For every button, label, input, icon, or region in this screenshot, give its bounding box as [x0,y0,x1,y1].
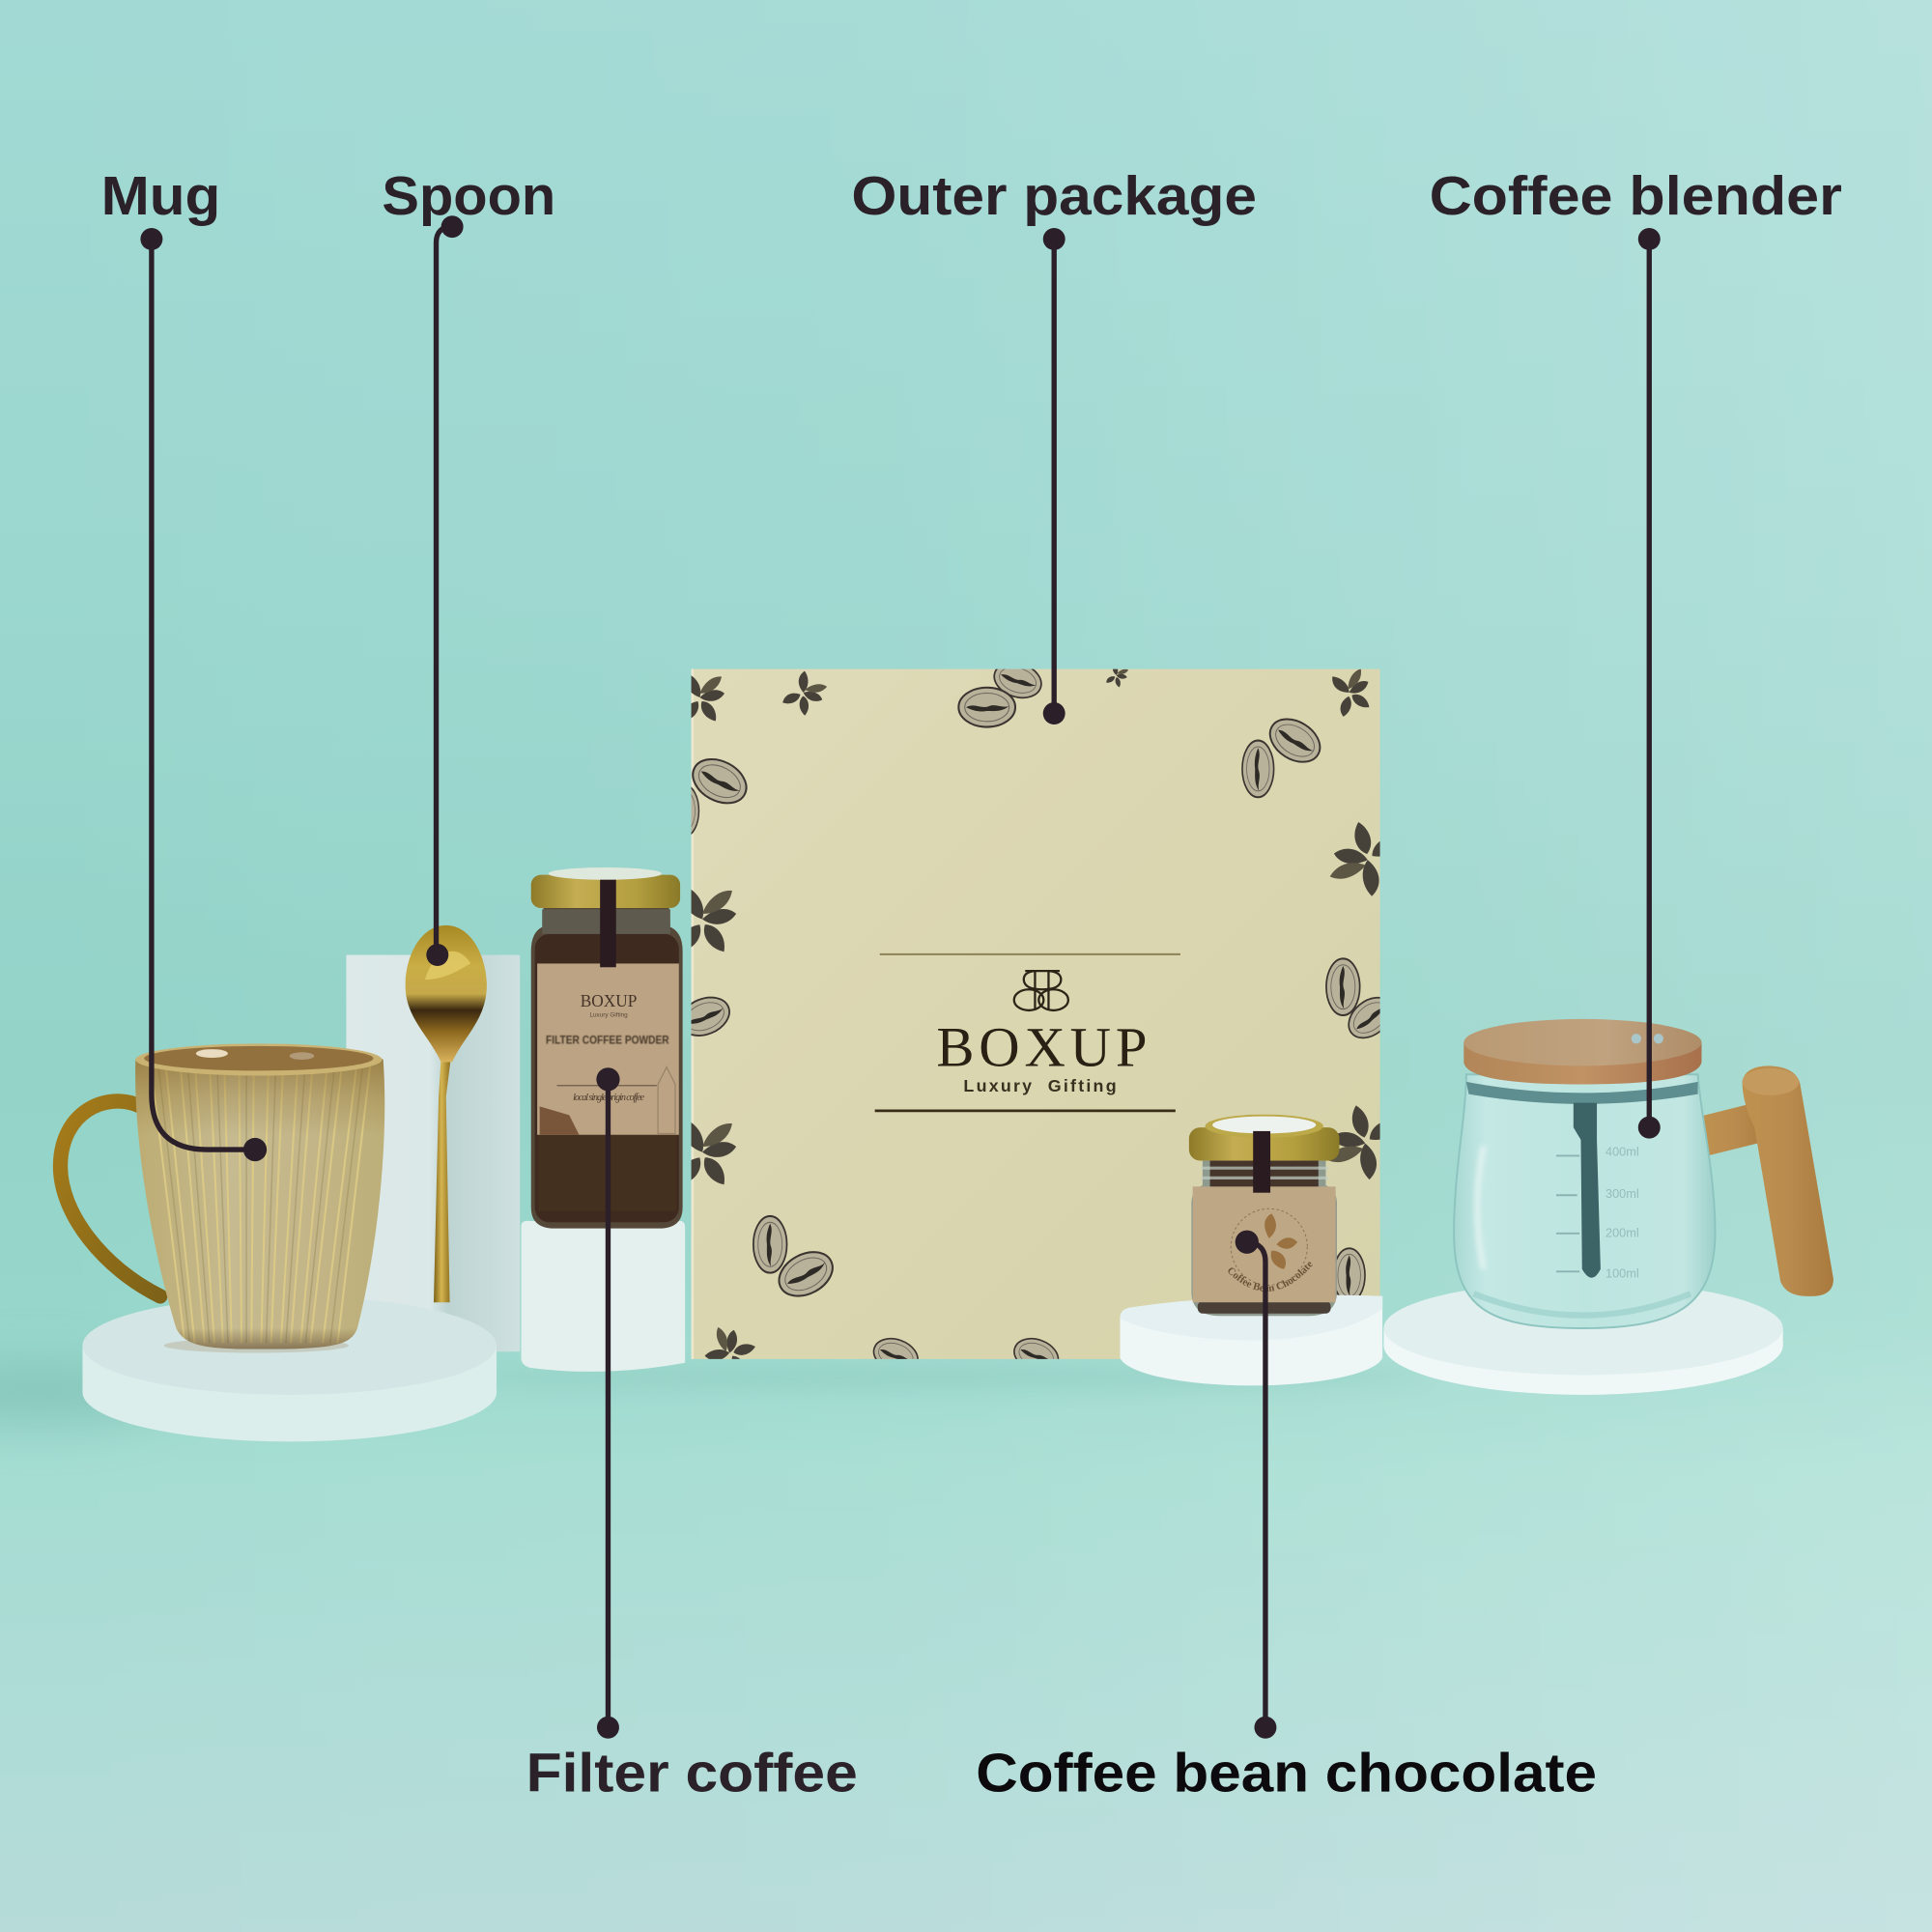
blender measuring scale: 200ml [1605,1226,1639,1240]
callout: Coffee bean chocolate: Coffee bean chocolate [976,1743,1597,1804]
item: filter coffee jar [531,867,683,1229]
callout: Mug: Mug [101,165,220,226]
blender wooden lid [1463,1019,1701,1084]
callout: Filter coffee: Filter coffee [526,1743,858,1804]
prop: right white disc [1383,1282,1783,1395]
panel: outer package box [671,657,1401,1378]
box logo: BOXUP Luxury Gifting [875,954,1180,1111]
callout: Outer package [851,165,1257,724]
mug body with ribs [135,1059,384,1349]
jar lid [531,875,680,908]
jar label [537,963,679,1135]
jar glass and coffee powder [531,907,683,1229]
callout: Coffee bean chocolate [976,1231,1597,1804]
callout: Spoon [382,165,555,966]
item: coffee blender [1454,1019,1833,1328]
prop: small disc under chocolate jar [1120,1295,1382,1385]
blender mixing rod [1574,1103,1601,1278]
blender measuring scale [1556,1144,1639,1281]
blender measuring scale: 100ml [1605,1266,1639,1281]
chocolate jar seal tab [1253,1131,1270,1193]
callout: Coffee blender [1430,165,1842,1139]
box logo: BOXUP Luxury Gifting: BOXUP [936,1015,1148,1078]
callout: Spoon: Spoon [382,165,555,226]
blender glass body [1454,1074,1716,1328]
chocolate jar label [1192,1186,1336,1302]
chocolate jar lid [1189,1127,1339,1161]
callout: Coffee blender: Coffee blender [1430,165,1842,226]
mug rim [135,1043,382,1076]
callout: Filter coffee [526,1067,858,1804]
jar label: local single origin coffee [573,1093,645,1103]
chocolate jar glass [1191,1155,1337,1316]
prop: left white disc [82,1296,497,1441]
jar label: BOXUP [581,991,638,1010]
callout: Outer package: Outer package [851,165,1257,226]
item: mug [60,1042,394,1353]
chocolate jar label: Coffee Bean Chocolate [1229,1262,1313,1292]
mug handle [60,1101,160,1296]
blender measuring scale: 300ml [1605,1186,1639,1201]
jar seal tab [600,880,616,967]
callout: Mug [101,165,267,1161]
blender wooden handle [1700,1065,1833,1296]
blender measuring scale: 400ml [1605,1144,1639,1158]
item: gold spoon [406,925,487,1302]
prop: white block behind spoon [346,955,520,1351]
box logo: BOXUP Luxury Gifting: Luxury Gifting [963,1076,1117,1095]
item: coffee bean chocolate jar [1188,1115,1339,1316]
box print: coffee beans and leaves [671,657,1401,1378]
jar label: FILTER COFFEE POWDER [546,1033,669,1046]
jar label: Luxury Gifting [589,1011,628,1018]
prop: small block under filter coffee jar [522,1221,685,1372]
